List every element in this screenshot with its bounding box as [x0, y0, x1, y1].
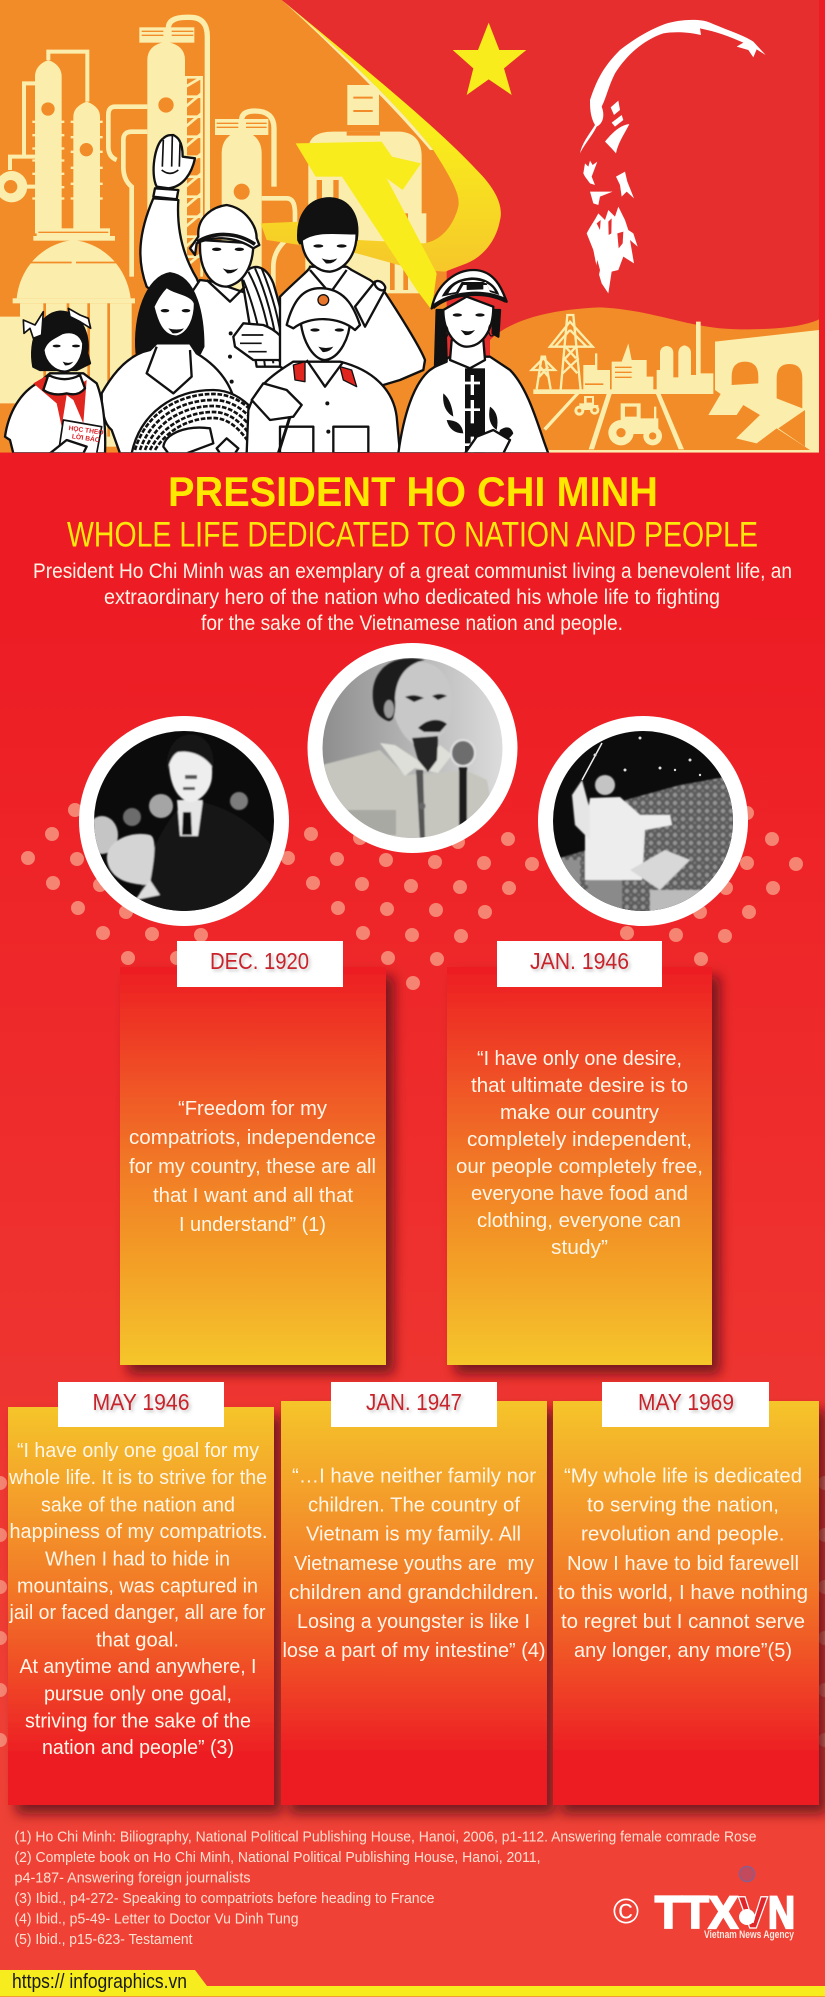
TTXVN logo — [613, 1887, 795, 1941]
soldier — [247, 288, 400, 453]
hero banner illustration — [0, 0, 819, 453]
TTXVN logo: N — [768, 1887, 795, 1938]
quote text: everyone have food and — [471, 1182, 688, 1205]
quote text: “I have only one desire, — [477, 1047, 682, 1070]
power pylons — [532, 315, 593, 390]
lower orange hill scene — [490, 307, 819, 453]
quote text: Vietnamese youths are my — [294, 1552, 535, 1575]
quote text: Losing a youngster is like I — [297, 1610, 530, 1633]
date label: JAN. 1947 — [331, 1382, 497, 1427]
introduction paragraph: extraordinary hero of the nation who dedicated his whole life to fighting — [104, 586, 720, 609]
quote text: “I have only one goal for my — [17, 1439, 260, 1462]
small globe mark — [740, 1866, 754, 1882]
schoolgirl: HỌC THEO — [68, 425, 104, 437]
woman in traditional dress — [398, 270, 548, 453]
quote text: children and grandchildren. — [289, 1581, 539, 1604]
quote text: our people completely free, — [456, 1155, 703, 1178]
hammer and sickle — [261, 0, 501, 310]
woman with rice sheaf — [102, 273, 277, 453]
quote text: revolution and people. — [581, 1522, 784, 1546]
quote text: to regret but I cannot serve — [561, 1610, 805, 1633]
card: January 1947 — [281, 1382, 547, 1805]
quote text: Vietnam is my family. All — [306, 1522, 521, 1546]
quote text: whole life. It is to strive for the — [8, 1466, 267, 1489]
quote text: I understand” (1) — [179, 1213, 326, 1236]
TTXVN logo: TTX — [655, 1887, 738, 1938]
date label: MAY 1946 — [58, 1382, 224, 1427]
footnotes: p4-187- Answering foreign journalists — [14, 1870, 250, 1886]
schoolgirl — [5, 308, 105, 453]
quote text — [558, 1464, 808, 1662]
quote text: completely independent, — [467, 1128, 692, 1151]
quote text: compatriots, independence — [129, 1126, 376, 1149]
quote text: pursue only one goal, — [44, 1682, 232, 1706]
quote text: for my country, these are all — [129, 1155, 376, 1178]
quote text: striving for the sake of the — [25, 1710, 251, 1732]
footnotes: (4) Ibid., p5-49- Letter to Doctor Vu Dinh Tung — [14, 1910, 298, 1928]
card: May 1946 — [8, 1382, 274, 1805]
quote text: that ultimate desire is to — [471, 1074, 688, 1097]
quote text: lose a part of my intestine” (4) — [282, 1639, 546, 1662]
quote text: At anytime and anywhere, I — [20, 1655, 256, 1678]
photo: Ho Chi Minh conducting, right circle — [538, 716, 748, 926]
young man behind — [280, 198, 425, 400]
footer band with url — [0, 1970, 825, 1997]
date label: JAN. 1946 — [497, 941, 662, 987]
factory silhouettes — [0, 27, 426, 447]
quote text: jail or faced danger, all are for — [9, 1601, 266, 1624]
yellow star — [453, 23, 526, 95]
footnotes: (2) Complete book on Ho Chi Minh, National Political Publishing House, Hanoi, 2011, — [14, 1849, 540, 1866]
quote text: happiness of my compatriots. — [10, 1520, 268, 1543]
card: January 1946 — [447, 941, 712, 1365]
quote text — [282, 1464, 546, 1662]
footnotes: (1) Ho Chi Minh: Biliography, National Political Publishing House, Hanoi, 2006, p1-112. Answering female comrade Rose — [14, 1828, 756, 1846]
quote text: Now I have to bid farewell — [567, 1552, 799, 1575]
factory pipes — [8, 14, 298, 288]
TTXVN logo: V — [738, 1887, 768, 1938]
quote text: clothing, everyone can — [477, 1209, 681, 1232]
red flag field — [282, 0, 819, 367]
introduction paragraph: for the sake of the Vietnamese nation and people. — [201, 612, 623, 635]
date label: DEC. 1920: DEC. 1920 — [210, 948, 309, 974]
quote text: that goal. — [96, 1628, 179, 1652]
cream industrial skyline — [533, 322, 819, 453]
quote text: any longer, any more”(5) — [574, 1639, 792, 1662]
date label: MAY 1969: MAY 1969 — [638, 1389, 734, 1415]
date label: JAN. 1947: JAN. 1947 — [366, 1389, 462, 1415]
quote text: “My whole life is dedicated — [564, 1464, 802, 1488]
factory orange cut-outs — [4, 31, 422, 437]
quote text — [8, 1439, 267, 1759]
quote text: mountains, was captured in — [17, 1574, 258, 1598]
quote text: to this world, I have nothing — [558, 1581, 808, 1604]
quote text: sake of the nation and — [41, 1494, 235, 1516]
quote text: that I want and all that — [153, 1184, 353, 1207]
quote text: “…I have neither family nor — [292, 1464, 536, 1488]
photo: Ho Chi Minh at microphone, centre circle — [308, 643, 518, 853]
quote text: study” — [551, 1236, 608, 1259]
worker with raised arm — [140, 135, 287, 453]
TTXVN logo: © — [613, 1892, 639, 1931]
date label: MAY 1969 — [602, 1382, 769, 1427]
card: May 1969 — [553, 1382, 819, 1805]
footnotes: (5) Ibid., p15-623- Testament — [14, 1931, 193, 1948]
quote text: to serving the nation, — [587, 1494, 779, 1516]
date label: MAY 1946: MAY 1946 — [92, 1389, 190, 1415]
portrait silhouette of Ho Chi Minh — [580, 20, 766, 293]
quote text: When I had to hide in — [45, 1548, 230, 1570]
schoolgirl: LỜI BÁC — [71, 431, 100, 444]
date label: JAN. 1946: JAN. 1946 — [530, 948, 629, 974]
quote text — [456, 1047, 703, 1259]
footer band with url: https:// infographics.vn — [12, 1971, 187, 1993]
quote text: make our country — [500, 1101, 660, 1124]
photo: young Ho Chi Minh speaking, left circle — [79, 716, 289, 926]
TTXVN logo: Vietnam News Agency — [704, 1929, 795, 1941]
group of people — [5, 135, 548, 453]
decorative dots field — [0, 803, 825, 1747]
quote text: children. The country of — [308, 1494, 520, 1516]
date label: DEC. 1920 — [177, 941, 343, 987]
hero orange background — [0, 0, 501, 453]
footnotes: (3) Ibid., p4-272- Speaking to compatriots before heading to France — [14, 1890, 434, 1907]
main title: PRESIDENT HO CHI MINH — [168, 468, 658, 515]
quote text: “Freedom for my — [178, 1097, 328, 1120]
card: December 1920 — [120, 941, 386, 1365]
footnotes — [14, 1828, 756, 1948]
quote text — [129, 1097, 376, 1236]
introduction paragraph — [33, 560, 792, 635]
quote text: nation and people” (3) — [42, 1736, 234, 1759]
